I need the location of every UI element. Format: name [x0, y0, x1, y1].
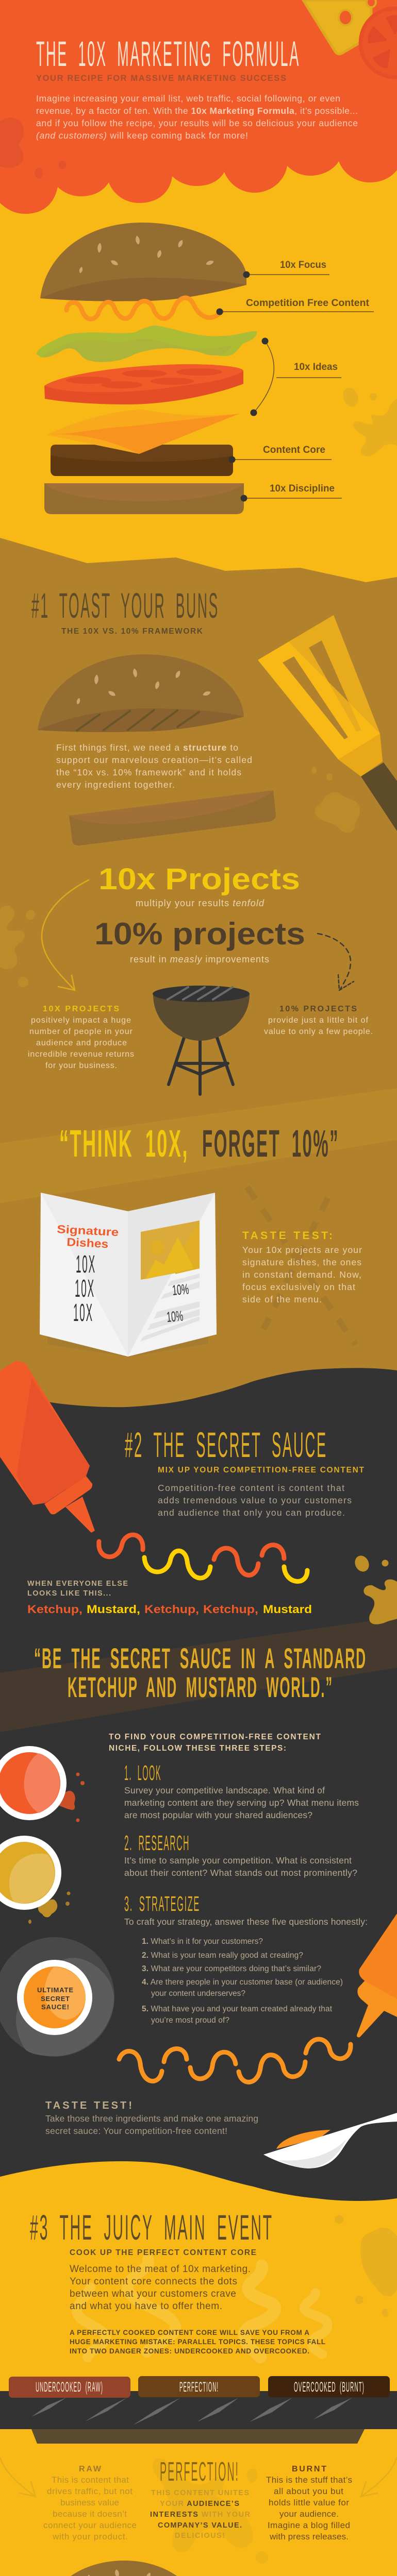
text block: 10x projects: number of people in your: [29, 1027, 133, 1036]
caption: tenfold: multiply your results tenfold: [136, 898, 264, 908]
icon: ultimate secret sauce dish: SAUCE!: [41, 2003, 69, 2011]
label: 10x Ideas with bracket: 10x Ideas: [294, 362, 338, 372]
tab: undercooked: [9, 2377, 130, 2398]
step 2: research: about their content? What stands out most prominently?: [124, 1868, 357, 1878]
intro: three steps: [109, 1733, 321, 1753]
intro text: (and customers) will keep coming back for more!: [36, 130, 248, 141]
callout: taste test: focus exclusively on that: [242, 1282, 355, 1292]
icon: top bun: [40, 223, 246, 301]
burger callout labels: [217, 260, 374, 502]
text block: structure: First things first, we need a structure to: [56, 742, 238, 753]
step 1: look: 1. LOOK: [124, 1761, 161, 1785]
callout: taste test: in constant demand. Now,: [242, 1269, 361, 1280]
callout: taste test: [45, 2100, 258, 2136]
step 2: research: [124, 1831, 357, 1878]
step 1: look: are most popular with your shared audiences?: [124, 1810, 312, 1820]
icon: red splat: [0, 118, 67, 179]
menu 10x and 10% items: 10%: [172, 1281, 189, 1298]
icon: bottom bun: [44, 483, 244, 514]
text block: 10% projects: [264, 1005, 373, 1036]
callout: taste test: secret sauce: Your competition-free content!: [45, 2126, 227, 2136]
label: Content Core: [229, 445, 332, 463]
column: raw: with your product.: [52, 2532, 128, 2541]
text block: danger zones: [70, 2329, 325, 2355]
text: when everyone else: LOOKS LIKE THIS...: [27, 1589, 111, 1598]
column: raw: RAW: [79, 2465, 102, 2473]
panel: #3 the juicy main event: [0, 2161, 397, 2576]
step 1: look: [124, 1761, 359, 1820]
column: perfection: YOUR AUDIENCE’S: [160, 2500, 239, 2508]
callout: taste test: side of the menu.: [242, 1294, 322, 1304]
icon: ketchup dish: [0, 1746, 85, 1822]
column: burnt: BURNT: [292, 2465, 326, 2473]
stat: 10x projects: 10x Projects: [98, 862, 300, 896]
icon: mustard splat: [352, 1553, 397, 1624]
text block: definition: and audience that only you can produce.: [158, 1507, 345, 1518]
column: raw: This is content that: [52, 2475, 129, 2485]
list: five questions: your content underserves?: [151, 1989, 245, 1998]
caption: measly: result in measly improvements: [130, 954, 269, 964]
text block: 10x projects: 10X PROJECTS: [43, 1005, 119, 1013]
step 2: research: It’s time to sample your competition. What is consistent: [124, 1855, 352, 1866]
icon: spoon: [263, 2113, 397, 2168]
column: raw: connect your audience: [43, 2520, 137, 2530]
icon: tomato corner: [359, 7, 397, 79]
text block: 10x projects: incredible revenue returns: [28, 1050, 134, 1059]
text: ketchup mustard row: [27, 1603, 312, 1616]
quote band: [0, 1088, 397, 1203]
icon: ultimate secret sauce dish: [0, 1937, 114, 2057]
quote: be the secret sauce: [34, 1642, 367, 1703]
callout: taste test: Take those three ingredients and make one amazing: [45, 2113, 258, 2124]
steam: [77, 2259, 327, 2357]
text block: content core: between what your customers crave: [70, 2289, 236, 2299]
intro text: Imagine increasing your email list, web traffic, social following, or even: [36, 93, 340, 104]
step 1: look: marketing content are they serving up? What menu items: [124, 1798, 359, 1808]
menu 10x and 10% items: [73, 1251, 189, 1327]
text block: 10% projects: 10% PROJECTS: [279, 1005, 357, 1013]
icon: grill bar: [0, 2391, 397, 2444]
icon: lettuce: [37, 326, 257, 362]
text block: structure: every ingredient together.: [56, 779, 175, 790]
icon: tomato slab: [44, 364, 243, 404]
menu 10x and 10% items: 10X: [73, 1299, 93, 1327]
label: 10x Focus: 10x Focus: [280, 260, 326, 270]
text block: content core: Welcome to the meat of 10x marketing.: [70, 2264, 251, 2275]
list: five questions: 5. What have you and your team created already that: [142, 2005, 333, 2013]
icon: mustard dish: [0, 1836, 70, 1924]
panel: #3 the juicy main event: PERFECTION!: [160, 2457, 239, 2487]
icon: tilted bottom bun: [69, 790, 276, 845]
menu heading: [57, 1223, 119, 1250]
step 1: look: Survey your competitive landscape. What kind of: [124, 1785, 325, 1795]
icon: sauce squiggle: [67, 298, 222, 319]
text block: 10% projects: value to only a few people.: [264, 1027, 373, 1036]
text block: definition: Competition-free content is content that: [158, 1483, 344, 1493]
icon: ketchup bottle: [0, 1361, 95, 1533]
column: raw: because it doesn’t: [53, 2509, 127, 2519]
panel: #2 the secret sauce: [0, 1361, 397, 2215]
arrow: left yellow curve: [0, 2386, 36, 2497]
column: perfection: [150, 2457, 251, 2540]
menu 10x and 10% items: 10X: [76, 1251, 96, 1278]
text block: content core: and what you have to offer them.: [70, 2301, 222, 2312]
column: burnt: holds little value for: [269, 2498, 349, 2507]
arrow: yellow curve: [42, 880, 89, 990]
column: burnt: [266, 2465, 352, 2541]
label: 10x Focus: [243, 260, 329, 278]
text block: structure: the “10x vs. 10% framework” and it holds: [56, 767, 241, 777]
label: Content Core: Content Core: [263, 445, 325, 455]
icon: sauce squiggles: [99, 1535, 307, 1581]
step 3: strategize: 3. STRATEGIZE: [124, 1892, 200, 1916]
column: burnt: with press releases.: [269, 2532, 349, 2541]
column: perfection: COMPANY’S VALUE.: [158, 2521, 242, 2530]
label: 10x Ideas with bracket: [251, 338, 341, 416]
icon: cheese corner: [303, 0, 376, 54]
label: Competition Free Content: [217, 298, 374, 315]
text: ketchup mustard row: Mustard,: [87, 1603, 140, 1616]
column: perfection: THIS CONTENT UNITES: [151, 2489, 249, 2497]
intro: three steps: TO FIND YOUR COMPETITION-FREE CONTENT: [109, 1733, 321, 1741]
text block: 10x projects: audience and produce: [36, 1039, 127, 1047]
text: ketchup mustard row: Ketchup,: [203, 1603, 258, 1616]
icon: sauce splat right: [340, 385, 397, 456]
quote band: [0, 1617, 397, 1732]
text block: danger zones: INTO TWO DANGER ZONES: UNDERCOOKED AND OVERCOOKED.: [70, 2347, 309, 2355]
menu heading: Dishes: [67, 1235, 109, 1250]
tab: overcooked: [268, 2376, 390, 2397]
decorative dashed X: [247, 1187, 356, 1345]
list: five questions: 3. What are your competitors doing that’s similar?: [142, 1964, 321, 1973]
step 3: strategize: To craft your strategy, answer these five questions honestly:: [124, 1917, 368, 1927]
list: five questions: you’re most proud of?: [151, 2016, 229, 2025]
column: perfection: DELICIOUS!: [175, 2532, 225, 2540]
text block: 10x projects: for your business.: [45, 1061, 117, 1070]
column: burnt: Imagine a blog filled: [268, 2520, 350, 2530]
callout: taste test: TASTE TEST!: [45, 2100, 132, 2111]
menu stripes: [140, 1274, 200, 1342]
step 2: research: 2. RESEARCH: [124, 1831, 190, 1855]
tab: undercooked: UNDERCOOKED (RAW): [36, 2379, 103, 2395]
icon: burger with sauce and patty: [45, 2561, 197, 2576]
label: Competition Free Content: Competition Free Content: [246, 298, 370, 309]
text block: 10x projects: positively impact a huge: [31, 1016, 131, 1025]
intro text: and if you follow the recipe, your results will be so delicious your audience: [36, 118, 358, 128]
subheading: MIX UP YOUR COMPETITION-FREE CONTENT: [158, 1466, 365, 1475]
column: raw: drives traffic, but not: [47, 2486, 133, 2496]
text block: danger zones: HUGE MARKETING MISTAKE: PARALLEL TOPICS. THESE TOPICS FALL: [70, 2338, 325, 2346]
icon: patty: [51, 445, 233, 476]
text block: definition: [158, 1483, 352, 1518]
icon: splats: [0, 767, 360, 987]
icon: cheese slice: [47, 410, 239, 454]
quote: think 10x forget 10%: “THINK 10X,: [59, 1122, 189, 1165]
intro text: [36, 93, 358, 141]
column: burnt: all about you but: [274, 2486, 343, 2496]
text: ketchup mustard row: Ketchup,: [144, 1603, 199, 1616]
subheading: COOK UP THE PERFECT CONTENT CORE: [70, 2248, 256, 2257]
text block: 10x projects: [28, 1005, 134, 1070]
icon: grill: [153, 986, 250, 1094]
text block: structure: [56, 742, 252, 790]
tab: perfection: [138, 2376, 260, 2397]
stat: 10% projects: 10% projects: [94, 917, 305, 951]
icon: toasted top bun: [38, 654, 244, 732]
column: burnt: your audience.: [279, 2509, 339, 2519]
intro: three steps: NICHE, FOLLOW THESE THREE STEPS:: [109, 1744, 286, 1753]
icon: menu picture: [141, 1221, 200, 1280]
column: raw: business value: [60, 2498, 119, 2507]
text: ketchup mustard row: Mustard: [263, 1603, 312, 1616]
callout: taste test: Your 10x projects are your: [242, 1245, 362, 1255]
text: when everyone else: WHEN EVERYONE ELSE: [27, 1580, 128, 1588]
step 3: strategize: [124, 1892, 368, 1927]
column: burnt: This is the stuff that’s: [266, 2475, 352, 2485]
text block: definition: adds tremendous value to your customers: [158, 1495, 352, 1505]
text block: danger zones: A PERFECTLY COOKED CONTENT CORE WILL SAVE YOU FROM A: [70, 2329, 309, 2336]
icon: ultimate secret sauce dish: ULTIMATE: [37, 1986, 73, 1994]
intro text: revenue, by a factor of ten. With the 10x Marketing Formula, it’s possible...: [36, 106, 358, 116]
callout: taste test: signature dishes, the ones: [242, 1257, 361, 1267]
callout: taste test: TASTE TEST:: [242, 1230, 333, 1242]
menu heading: Signature: [57, 1223, 119, 1239]
text block: structure: support our marvelous creation—it’s called: [56, 755, 252, 765]
icon: spatula: [258, 615, 397, 831]
panel: #1 toast your buns: [0, 538, 397, 1443]
text block: content core: [70, 2264, 251, 2312]
menu 10x and 10% items: 10%: [166, 1308, 184, 1325]
icon: splat behind perfection: [153, 2459, 268, 2564]
callout: taste test: [242, 1230, 362, 1304]
arrow: right yellow curve: [361, 2396, 397, 2497]
text: ketchup mustard row: Ketchup,: [27, 1603, 82, 1616]
list: five questions: 4. Are there people in your customer base (or audience): [142, 1978, 343, 1987]
text: when everyone else: [27, 1580, 128, 1598]
arrow: dashed dark curve: [318, 934, 354, 990]
list: five questions: 1. What’s in it for your customers?: [142, 1937, 263, 1946]
label: 10x Discipline: [240, 483, 342, 502]
menu 10x and 10% items: 10X: [75, 1275, 95, 1302]
list: five questions: [142, 1937, 343, 2025]
list: five questions: 2. What is your team really good at creating?: [142, 1951, 303, 1960]
burger: exploded diagram: [37, 223, 257, 514]
icon: ultimate secret sauce dish: SECRET: [41, 1995, 70, 2003]
icon: orange squiggles: [119, 2039, 351, 2082]
icon: mustard bottle: [357, 1913, 397, 2037]
subheading: THE 10X VS. 10% FRAMEWORK: [61, 627, 203, 636]
text block: 10% projects: provide just a little bit of: [268, 1016, 369, 1025]
text block: content core: Your content core connects the dots: [70, 2276, 237, 2287]
tab: perfection: PERFECTION!: [179, 2379, 219, 2395]
column: perfection: INTERESTS WITH YOUR: [150, 2511, 251, 2519]
icon: menu: [40, 1193, 217, 1357]
label: 10x Discipline: 10x Discipline: [270, 483, 335, 494]
icon: blob: [335, 2215, 397, 2317]
column: raw: [43, 2465, 137, 2541]
subtitle: YOUR RECIPE FOR MASSIVE MARKETING SUCCESS: [36, 74, 286, 83]
panel: intro red header: [0, 0, 397, 214]
